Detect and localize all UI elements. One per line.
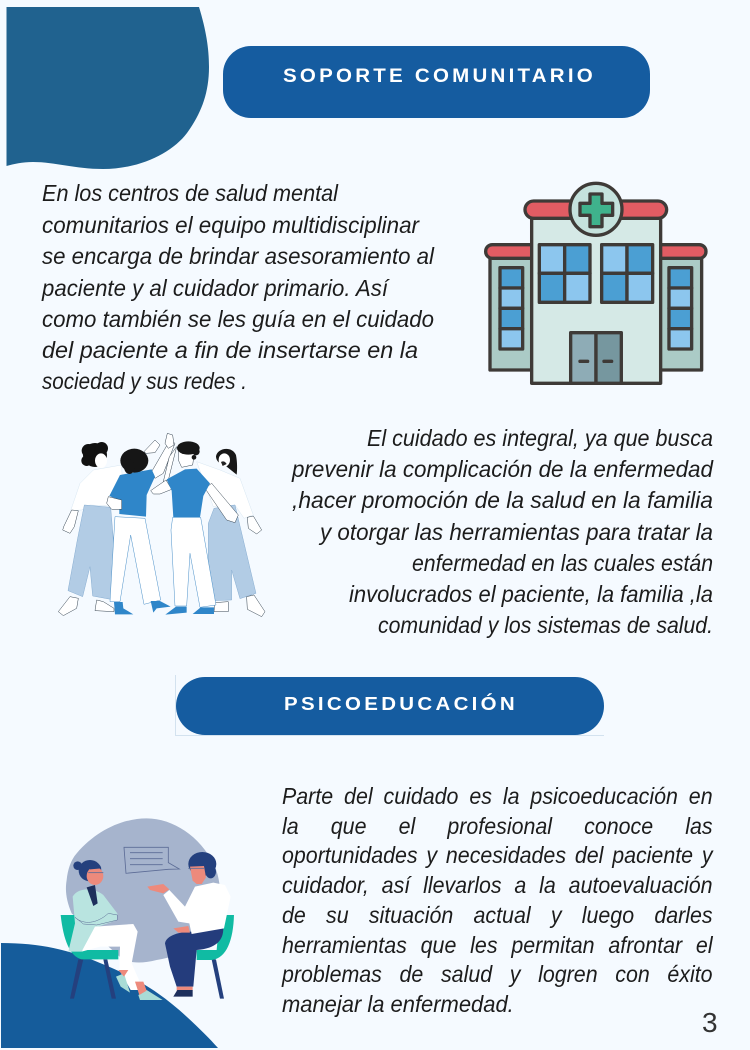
text block: centros de salud: como también se les guía en el cuidado (42, 306, 434, 332)
grey background shape (66, 818, 220, 962)
text block: psicoeducación: oportunidades y necesidades del paciente y (282, 842, 713, 868)
text block: psicoeducación (282, 783, 714, 1017)
illustration: group high five (58, 433, 265, 617)
front left person (107, 433, 175, 614)
hospital right window (602, 245, 653, 302)
heading: psicoeducación (176, 675, 604, 736)
text block: cuidado integral: El cuidado es integral, ya que busca (367, 425, 713, 451)
text block: psicoeducación: la que el profesional conoce las (282, 813, 713, 839)
text block: psicoeducación: cuidador, así llevarlos a la autoevaluación (282, 872, 713, 898)
text block: psicoeducación: manejar la enfermedad. (282, 991, 514, 1017)
text block: cuidado integral: prevenir la complicación de la enfermedad (291, 456, 714, 482)
text block: centros de salud: paciente y al cuidador primario. Así (41, 275, 391, 301)
heading: psicoeducación: PSICOEDUCACIÓN (284, 693, 518, 714)
decorative blob: bottom left (1, 943, 218, 1048)
hospital left wing (490, 257, 532, 370)
hospital left window (539, 245, 590, 302)
text block: centros de salud (41, 180, 435, 394)
decorative blob: top left (6, 7, 209, 169)
text block: centros de salud: del paciente a fin de insertarse en la (42, 337, 418, 363)
text block: centros de salud: se encarga de brindar asesoramiento al (42, 243, 435, 269)
heading: soporte comunitario (223, 46, 650, 118)
hospital side roofs (486, 245, 706, 258)
text block: centros de salud: comunitarios el equipo multidisciplinar (42, 212, 420, 238)
text block: psicoeducación: de su situación actual y luego darles (282, 902, 713, 928)
text block: cuidado integral: ,hacer promoción de la salud en la familia (292, 487, 713, 513)
text block: psicoeducación: herramientas que les permitan afrontar el (282, 932, 713, 958)
text block: cuidado integral: enfermedad en las cuales están (412, 550, 713, 576)
text block: cuidado integral (291, 425, 714, 638)
hospital left side window (500, 268, 523, 349)
hospital main block (532, 218, 661, 383)
hospital emblem (570, 183, 622, 235)
icon: hospital (486, 183, 706, 383)
illustration: consultation (61, 818, 234, 1000)
text block: cuidado integral: y otorgar las herramientas para tratar la (318, 519, 713, 545)
text block: cuidado integral: comunidad y los sistemas de salud. (378, 612, 713, 638)
text block: centros de salud: sociedad y sus redes . (42, 368, 247, 394)
text block: psicoeducación: problemas de salud y logren con éxito (282, 961, 713, 987)
front right person (151, 441, 238, 615)
back right person (197, 449, 265, 617)
heading: soporte comunitario: SOPORTE COMUNITARIO (283, 66, 596, 87)
hospital door (571, 333, 621, 383)
text block: cuidado integral: involucrados el paciente, la familia ,la (349, 581, 713, 607)
woman in chair (61, 860, 163, 1000)
text block: psicoeducación: Parte del cuidado es la psicoeducación en (282, 783, 713, 809)
hospital right side window (669, 268, 692, 349)
hospital right wing (660, 257, 702, 370)
text block: centros de salud: En los centros de salud mental (42, 180, 339, 206)
speech bubble (124, 847, 179, 873)
hospital top roof (525, 201, 667, 218)
page number: 3 (702, 1007, 718, 1038)
back left person (58, 442, 123, 616)
man in chair (147, 852, 234, 999)
